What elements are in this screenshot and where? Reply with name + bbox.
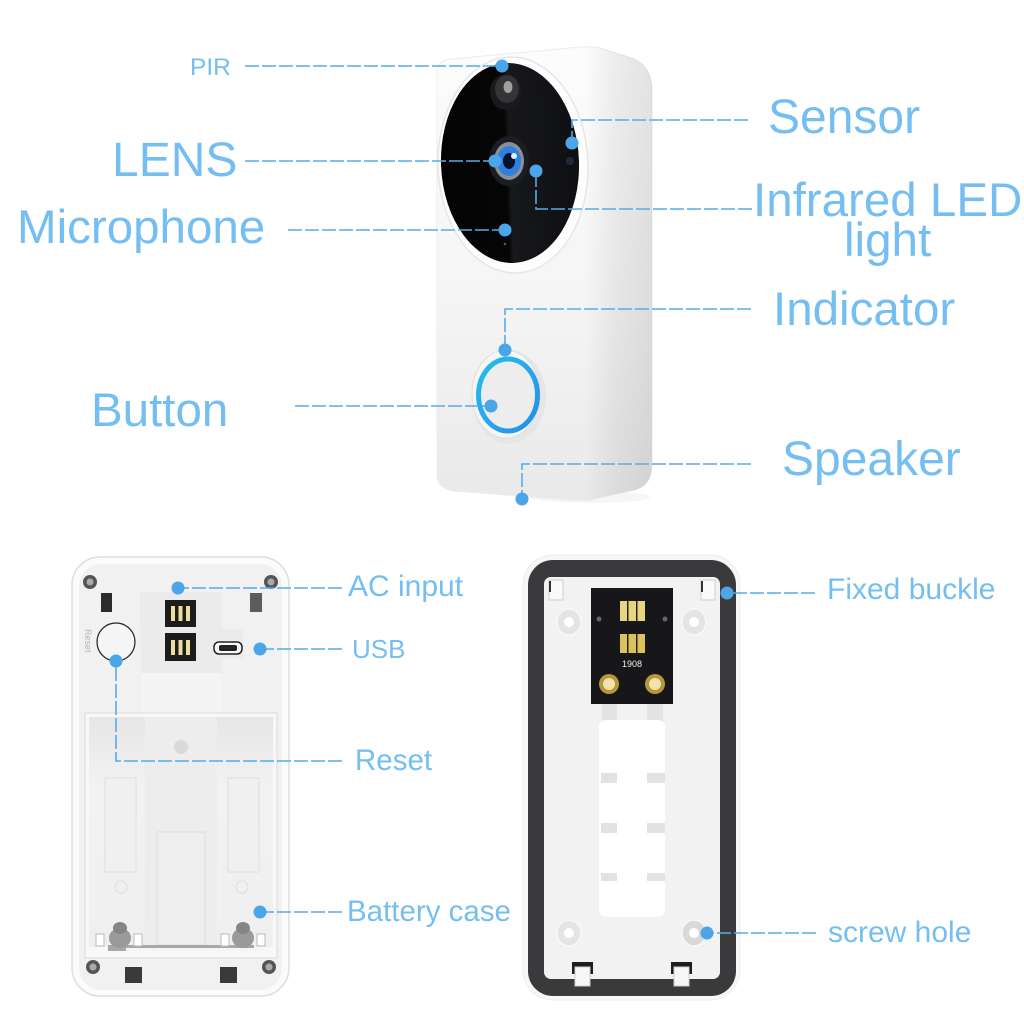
- label: PIR: [190, 54, 508, 81]
- label: Infrared LED light: light: [844, 214, 931, 267]
- device body: [437, 47, 652, 501]
- label: Button: [91, 384, 498, 437]
- back shell: [72, 557, 289, 996]
- battery springs: [96, 922, 265, 948]
- camera lens: [489, 136, 529, 186]
- device side face shading: [437, 47, 652, 501]
- top clips: [549, 580, 715, 600]
- white window with notches: [599, 720, 665, 917]
- reset engraved text: Reset: [83, 629, 93, 653]
- PIR sensor: [490, 74, 522, 110]
- label: LENS: [112, 134, 502, 187]
- label: Battery case: [254, 895, 511, 928]
- label: Microphone: Microphone: [17, 201, 265, 254]
- doorbell front device: [434, 47, 652, 503]
- label: Battery case: Battery case: [347, 895, 511, 928]
- back plate: [79, 564, 282, 990]
- bracket plate: [544, 577, 720, 979]
- label: Sensor: [566, 91, 920, 150]
- label: LENS: LENS: [112, 134, 237, 187]
- label: AC input: [172, 570, 464, 603]
- mounting screw holes: [557, 609, 706, 946]
- label: Microphone: [17, 201, 512, 254]
- label: AC input: AC input: [348, 570, 464, 603]
- label: PIR: PIR: [190, 54, 231, 81]
- sensor hole: [566, 157, 574, 165]
- label: Infrared LED light: Infrared LED: [753, 174, 1022, 227]
- bracket outer rim: [523, 555, 740, 1000]
- connector recess: [140, 592, 243, 713]
- reset button: [97, 623, 135, 661]
- camera white ring: [434, 54, 592, 276]
- label: Indicator: Indicator: [773, 283, 955, 336]
- screws top and bottom: [83, 575, 278, 974]
- battery compartment: [85, 713, 277, 958]
- top slots: [101, 593, 262, 612]
- label: Button: Button: [91, 384, 228, 437]
- label: Speaker: [516, 433, 961, 506]
- label: Fixed buckle: Fixed buckle: [827, 573, 995, 606]
- label: screw hole: [700, 916, 971, 949]
- label: Reset: Reset: [355, 744, 432, 777]
- dark gasket: [528, 560, 736, 996]
- mounting bracket: [523, 555, 740, 1000]
- bottom slots: [125, 967, 237, 983]
- micro USB port: [214, 642, 242, 654]
- circuit board: [591, 588, 673, 704]
- label: Speaker: Speaker: [782, 433, 961, 486]
- label: Fixed buckle: [720, 573, 995, 606]
- AC connectors: [165, 600, 196, 661]
- device ground shadow: [530, 491, 650, 503]
- rail legs: [602, 704, 663, 721]
- microphone hole: [504, 243, 506, 245]
- doorbell back panel: [72, 557, 289, 996]
- label: Sensor: Sensor: [768, 91, 920, 144]
- label: USB: USB: [352, 634, 405, 664]
- black glass panel: [438, 61, 582, 265]
- circuit board: 1908: [622, 659, 642, 669]
- label: Infrared LED light: [530, 164, 1022, 267]
- label: Reset: [110, 654, 432, 777]
- doorbell button: [472, 350, 546, 444]
- label: USB: [254, 634, 405, 664]
- label: screw hole: screw hole: [828, 916, 971, 949]
- label: Indicator: [498, 283, 955, 356]
- connector lower recess: [141, 673, 222, 713]
- bottom clips: [572, 962, 692, 986]
